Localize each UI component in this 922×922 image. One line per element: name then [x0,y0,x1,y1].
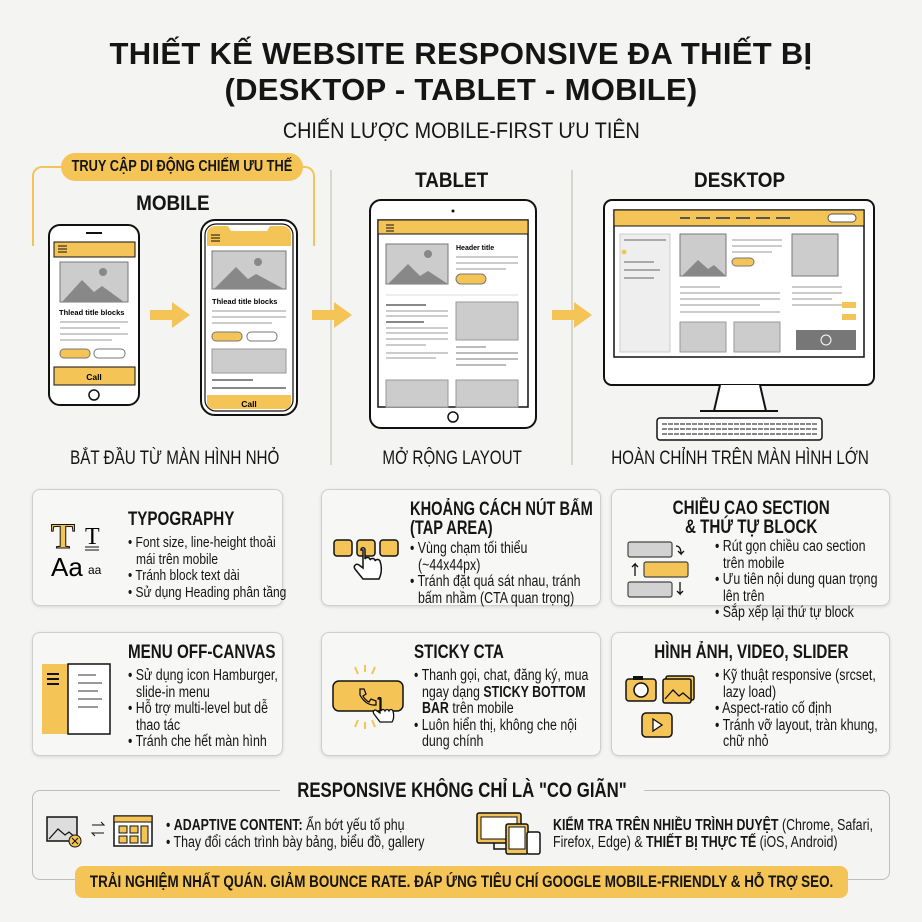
tablet [370,200,536,428]
bullets [128,534,286,600]
arrow 2 [312,302,352,328]
heading [673,497,830,538]
heading: CHIỀU CAO SECTION [673,498,830,519]
pill: mobile dominance: TRUY CẬP DI ĐỘNG CHIẾM ƯU THẾ [72,158,292,175]
label: desktop: DESKTOP [694,169,786,192]
arrow 1 [150,302,190,328]
icon: reorder blocks [627,541,689,598]
bullets: Luôn hiển thị, không che nội dung chính [422,716,577,750]
bullets: Sắp xếp lại thứ tự block [723,604,854,621]
title: (DESKTOP - TABLET - MOBILE) [224,72,698,107]
bullets: Hỗ trợ multi-level but dễ thao tác [136,700,268,734]
tablet: Header title [456,245,494,252]
banner: key benefits: TRẢI NGHIỆM NHẤT QUÁN. GIẢM BOUNCE RATE. ĐÁP ỨNG TIÊU CHÍ GOOGLE MOBILE-FRIENDLY & HỖ TRỢ SEO. [90,872,833,891]
bullets: Ưu tiên nội dung quan trọng lên trên [723,571,877,604]
bullets: Vùng chạm tối thiểu [418,540,527,557]
bullets [716,667,878,750]
text: cross-browser testing: KIỂM TRA TRÊN NHIỀU TRÌNH DUYỆT (Chrome, Safari, [553,817,873,834]
phone 1: Thlead title blocks [59,308,124,317]
bullets [716,538,877,621]
heading: TYPOGRAPHY [128,509,234,530]
heading: MENU OFF-CANVAS [128,642,275,663]
heading: responsive not just stretching: RESPONSIVE KHÔNG CHỈ LÀ "CO GIÃN" [297,779,627,802]
panel: typography [32,489,283,606]
bullets: Sử dụng Heading phân tầng [136,584,286,600]
icon: adaptive content [46,815,153,848]
panel: sticky CTA [321,632,601,756]
text: cross-browser testing [553,816,873,851]
label: tablet: TABLET [415,169,489,192]
bullets: Thanh gọi, chat, đăng ký, mua ngay dạng STICKY BOTTOM BAR trên mobile [422,667,588,717]
heading: STICKY CTA [414,642,504,663]
icon: typography: T [85,524,100,550]
icon: buttons and hand [333,539,399,580]
pill: mobile dominance [61,153,303,181]
bullets: Aspect-ratio cố định [722,700,832,717]
panel: menu off-canvas [32,632,283,756]
bullets [414,667,588,750]
title [110,36,812,107]
icon: off-canvas menu [42,663,111,735]
subtitle: CHIẾN LƯỢC MOBILE-FIRST ƯU TIÊN [282,118,640,143]
icon: typography: aa [88,563,102,577]
phone 2 [201,220,297,415]
bullets [128,667,278,750]
panel: tap area [321,489,601,606]
phone 1 [49,225,139,405]
panel: images video slider [611,632,890,756]
icon: media [625,675,695,738]
bullets: Sử dụng icon Hamburger, slide-in menu [136,667,278,700]
heading [410,498,593,539]
bullets [410,540,580,606]
banner: key benefits [75,866,848,898]
bullets: Tránh block text dài [135,567,240,584]
mobile bracket [32,166,315,246]
panel: responsive bottom [32,790,890,880]
bullets: Kỹ thuật responsive (srcset, lazy load) [723,667,876,700]
caption: desktop: HOÀN CHỈNH TRÊN MÀN HÌNH LỚN [611,448,869,469]
bullets: Rút gọn chiều cao section trên mobile [723,538,865,572]
arrow 3 [552,302,592,328]
text: adaptive content: • ADAPTIVE CONTENT: Ẩn bớt yếu tố phụ [166,817,405,834]
desktop monitor [604,200,874,440]
heading: HÌNH ẢNH, VIDEO, SLIDER [654,642,849,663]
bullets: (~44x44px) [418,556,480,574]
bullets: Tránh che hết màn hình [136,733,267,750]
panel: section height [611,489,890,606]
heading: & THỨ TỰ BLOCK [685,517,818,538]
icon: call button [332,665,404,729]
text: cross-browser testing: Firefox, Edge) & THIẾT BỊ THỰC TẾ (iOS, Android) [553,834,838,851]
heading: (TAP AREA) [410,518,493,539]
bullets: Font size, line-height thoải mái trên mobile [136,534,276,568]
devices illustration [48,170,875,465]
label: mobile: MOBILE [136,192,209,215]
text: adaptive content [166,816,424,851]
bullets: Tránh vỡ layout, tràn khung, chữ nhỏ [723,716,878,750]
text: adaptive content: • Thay đổi cách trình bày bảng, biểu đồ, gallery [166,834,424,851]
bullets: Tránh đặt quá sát nhau, tránh bấm nhầm (CTA quan trọng) [418,573,580,606]
heading: KHOẢNG CÁCH NÚT BẤM [410,499,593,520]
icon: multiple devices [476,812,541,855]
phone 2: Thlead title blocks [212,297,277,306]
phone 1: Call [86,372,102,382]
caption: mobile: BẮT ĐẦU TỪ MÀN HÌNH NHỎ [70,448,280,469]
title: THIẾT KẾ WEBSITE RESPONSIVE ĐA THIẾT BỊ [110,36,812,71]
phone 2: Call [241,399,257,409]
caption: tablet: MỞ RỘNG LAYOUT [383,448,522,469]
icon: typography [51,520,102,580]
